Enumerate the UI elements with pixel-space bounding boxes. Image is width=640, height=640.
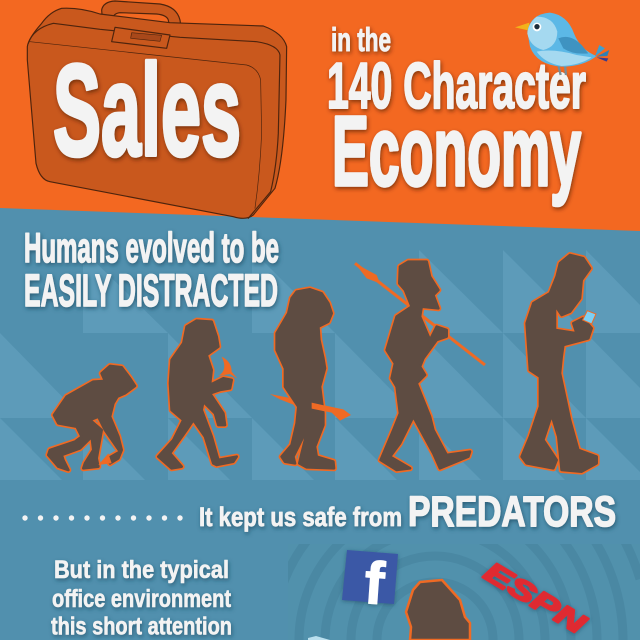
title: Sales: Sales xyxy=(53,37,241,183)
figure: crouching ape xyxy=(48,366,135,470)
text: But in the typical office environment this short attention: But in the typical xyxy=(54,556,229,584)
text: But in the typical office environment this short attention: office environment xyxy=(52,585,232,613)
icon: blue bird xyxy=(515,13,609,75)
figure: modern man with phone xyxy=(522,255,597,472)
figure: hunter with spear xyxy=(355,262,485,470)
dotted line xyxy=(22,515,183,521)
panel: distraction rings xyxy=(288,544,640,640)
heading: Humans evolved to be: Humans evolved to be xyxy=(24,224,279,271)
icon: suitcase xyxy=(27,1,287,218)
suitcase body xyxy=(27,8,287,218)
panel: orange header xyxy=(0,0,640,231)
figure: caveman with club xyxy=(270,289,351,468)
figure: ape with banana xyxy=(158,321,237,468)
text: But in the typical office environment this short attention xyxy=(51,556,232,640)
icon: facebook xyxy=(342,549,398,617)
figure: head from behind xyxy=(406,580,470,640)
suitcase handle xyxy=(98,1,192,43)
icon: ESPN: ESPN xyxy=(479,556,592,640)
title: in the: in the xyxy=(331,21,391,58)
icon: device corner xyxy=(308,636,330,640)
suitcase latch xyxy=(112,27,170,48)
icon: facebook: f xyxy=(362,549,388,617)
panel: blue background xyxy=(0,200,640,640)
text: It kept us safe from: It kept us safe from xyxy=(199,502,402,532)
heading: EASILY DISTRACTED: EASILY DISTRACTED xyxy=(24,265,278,316)
text: But in the typical office environment this short attention: this short attention xyxy=(51,612,232,640)
